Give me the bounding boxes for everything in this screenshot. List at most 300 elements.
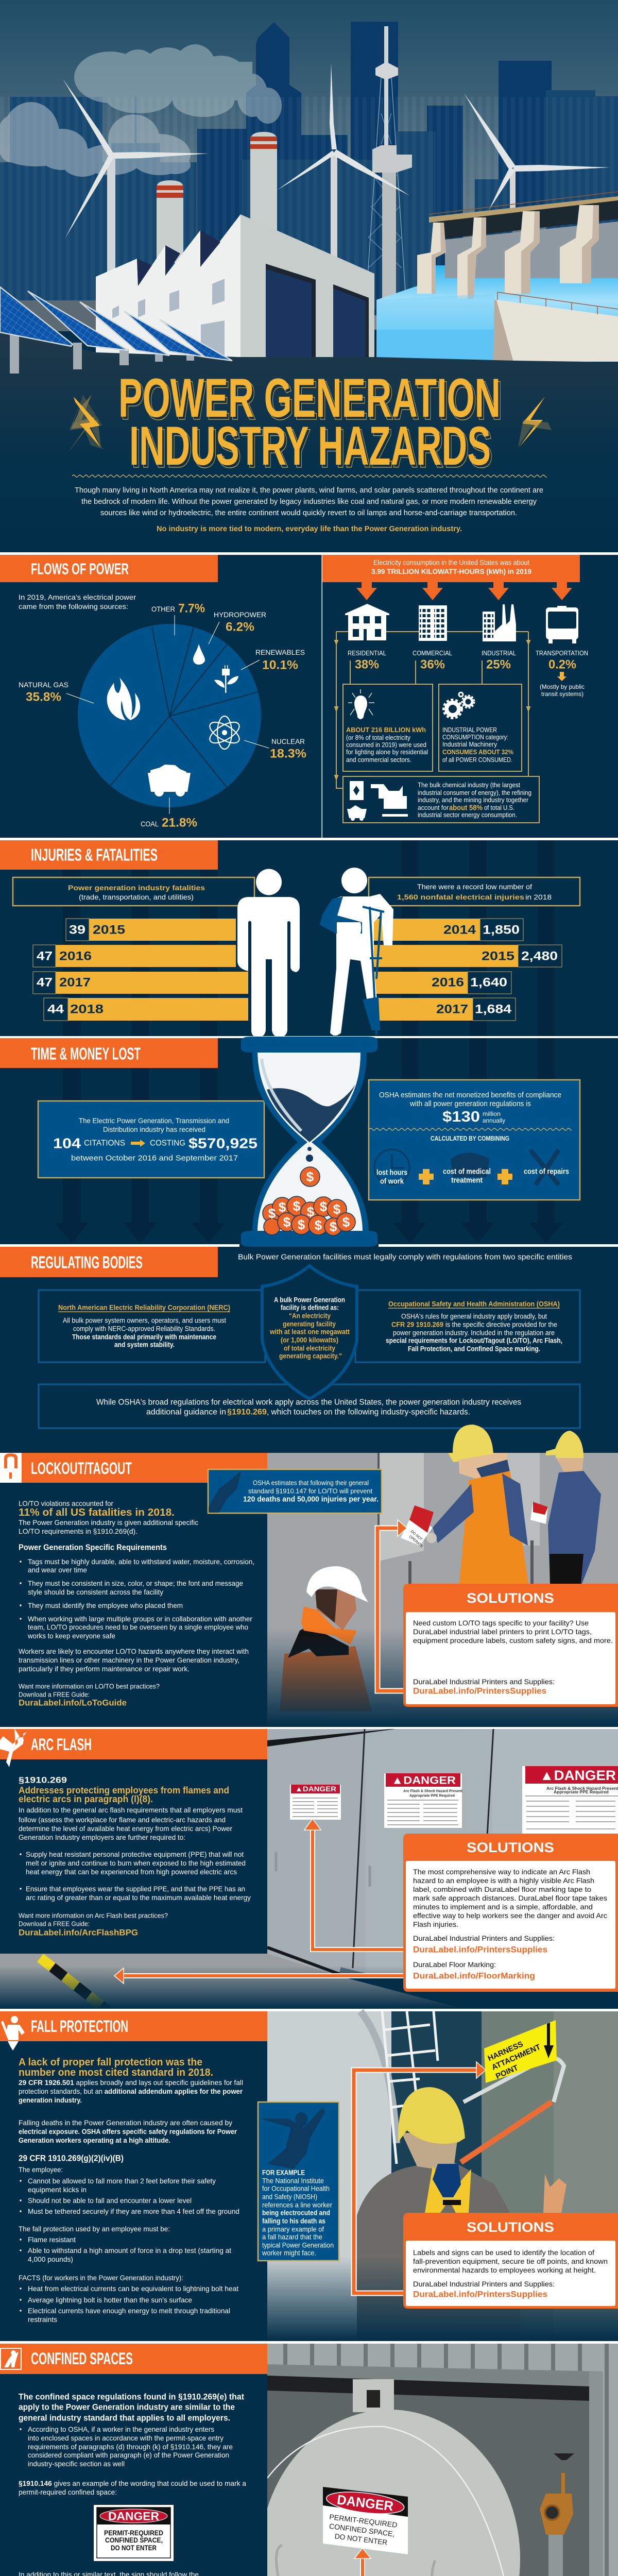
- panel: lighting consumption: and commercial sectors.: [346, 756, 411, 764]
- harness lanyard: [461, 2102, 552, 2162]
- text block: melt or ignite and continue to burn when exposed to the high estimated: [26, 1859, 246, 1867]
- text block: Power Generation Specific Requirements: [19, 1544, 167, 1552]
- consumption categories: 25%: [486, 657, 511, 672]
- harness attachment sign: [484, 2020, 557, 2083]
- text block: They must identify the employee who placed them: [28, 1601, 183, 1609]
- panel: pie chart of electrical sources: [66, 615, 269, 814]
- pie chart labels: COAL: [141, 820, 159, 828]
- pie chart labels: [19, 593, 306, 829]
- danger label 2: ▲DANGER: [391, 1774, 456, 1787]
- danger sign example: [94, 2505, 174, 2561]
- text block: The employee:: [19, 2165, 63, 2174]
- text block: heat energy that can be experienced from high powered electric arcs: [26, 1868, 237, 1876]
- harness attachment sign: POINT: [494, 2063, 520, 2081]
- panel: NERC: Those standards deal primarily with maintenance: [72, 1333, 216, 1341]
- panel: OSHA monetized benefits: treatment: [451, 1176, 483, 1185]
- intro text: sources like wind or hydroelectric, the entire continent would quickly revert to oil lamps and horse-and-carriage transportation.: [100, 509, 517, 517]
- title band background: [0, 330, 618, 552]
- solutions: arc flash: DuraLabel.info/FloorMarking: [413, 1971, 535, 1980]
- panel: electricity consumption header: 3.99 TRILLION KILOWATT-HOURS (kWh) in 2019: [371, 567, 531, 575]
- bar chart: nonfatal injuries: 2014: [443, 923, 476, 937]
- solutions: fall protection: environmental hazards to employees working at height.: [413, 2266, 596, 2274]
- shield: bulk power definition: (or 1,000 kilowatts): [281, 1336, 338, 1344]
- text block: permit-required confined space:: [19, 2488, 117, 2496]
- panel: NERC: All bulk power system owners, operators, and users must: [63, 1317, 226, 1324]
- text block: The fall protection used by an employee must be:: [19, 2225, 170, 2233]
- solutions: arc flash: hazard to an employee is with a highly visible Arc Flash: [413, 1876, 594, 1885]
- text block: [18, 2392, 248, 2576]
- text block: Should not be able to fall and encounter a lower level: [28, 2196, 192, 2205]
- icon: water drop: [193, 644, 205, 665]
- panel: OSHA regulations: CFR 29 1910.269: [391, 1321, 443, 1328]
- icon: coal cart: [148, 765, 191, 796]
- panel: OSHA regulations: is the specific directive provided for the: [445, 1321, 557, 1328]
- text block: When working with large multiple groups or in collaboration with another: [28, 1615, 252, 1623]
- shield: bulk power definition: of total electricity: [284, 1345, 335, 1352]
- hourglass with coins: $: [298, 1217, 305, 1232]
- panel: for example NIOSH: The National Institute: [262, 2177, 324, 2184]
- text block: Want more information on LO/TO best practices?: [19, 1683, 160, 1690]
- panel: OSHA closing note: additional guidance in: [146, 1408, 226, 1417]
- panel: OSHA monetized benefits: OSHA estimates the net monetized benefits of compliance: [379, 1091, 561, 1099]
- panel: for example NIOSH: for Occupational Health: [262, 2184, 330, 2193]
- consumption categories: TRANSPORTATION: [536, 650, 588, 657]
- panel: OSHA monetized benefits: annually: [483, 1117, 505, 1124]
- icon: light bulb: [348, 689, 374, 719]
- text block: Cannot be allowed to fall more than 2 feet before their safety: [28, 2177, 216, 2185]
- icon: injured person with sling and crutch: [320, 868, 393, 1036]
- wavy divider: [72, 474, 547, 478]
- danger sign on hatch: DANGER: [336, 2492, 394, 2514]
- hourglass with coins: $: [307, 1204, 315, 1219]
- panel: industrial consumption: Industrial Machinery: [442, 741, 497, 748]
- icon: flame: [107, 677, 140, 720]
- panel: citations: Distribution industry has received: [103, 1125, 205, 1133]
- panel: industrial consumption: [439, 684, 522, 771]
- panel: bulk chemical, refining, mining: industrial consumer of energy), the refining: [418, 789, 531, 796]
- panel: bulk chemical, refining, mining: account for: [418, 804, 449, 811]
- intro text: No industry is more tied to modern, everyday life than the Power Generation industry.: [157, 525, 462, 533]
- heading: LOCKOUT/TAGOUT: [31, 1459, 132, 1478]
- section: fall protection left panel: [0, 2011, 267, 2341]
- icon: confined space figure: [1, 2348, 21, 2369]
- heading: [0, 2344, 267, 2374]
- consumption categories: INDUSTRIAL: [482, 650, 516, 657]
- section: time and money lost heading: TIME & MONEY LOST: [31, 1044, 141, 1063]
- chimneys: [157, 132, 277, 263]
- text block: §1910.269: [19, 1775, 67, 1785]
- panel: for example NIOSH: [258, 2102, 339, 2261]
- text block: 11% of all US fatalities in 2018.: [19, 1507, 175, 1518]
- panel: electricity consumption header: Electricity consumption in the United States was about: [373, 558, 529, 567]
- panel: electricity consumption header: [322, 555, 580, 600]
- text block: restraints: [28, 2315, 57, 2324]
- solutions: lockout tagout: SOLUTIONS: [467, 1590, 554, 1606]
- callout: OSHA LO/TO estimate: standard §1910.147 for LO/TO will prevent: [248, 1487, 372, 1495]
- danger sign on hatch: CONFINED SPACE,: [329, 2522, 395, 2538]
- panel: for example NIOSH: FOR EXAMPLE: [262, 2169, 305, 2176]
- bar chart: nonfatal injuries: 2,480: [521, 949, 558, 963]
- bar chart: fatalities: [33, 919, 248, 1021]
- panel: citations: COSTING: [150, 1139, 185, 1148]
- pie chart labels: 10.1%: [262, 658, 298, 672]
- solutions: lockout tagout: [403, 1584, 618, 1707]
- section: flows of power heading: [0, 555, 218, 582]
- callout: nonfatal injuries: 1,560 nonfatal electrical injuries: [397, 893, 524, 901]
- hourglass with coins: $: [279, 1199, 286, 1215]
- heading: CONFINED SPACES: [31, 2349, 133, 2368]
- hourglass with coins: $: [268, 1206, 276, 1221]
- callout: nonfatal injuries: in 2018: [525, 893, 552, 901]
- hourglass with coins: $: [306, 1169, 314, 1184]
- text block: equipment kicks in: [28, 2185, 87, 2194]
- solar panels: [0, 287, 232, 374]
- text block: Download a FREE Guide:: [19, 1691, 90, 1698]
- heading: FALL PROTECTION: [31, 2017, 128, 2036]
- section: arc flash left panel: [0, 1728, 267, 1954]
- text block: Falling deaths in the Power Generation industry are often caused by: [19, 2119, 232, 2127]
- text block: Tags must be highly durable, able to withstand water, moisture, corrosion,: [28, 1557, 254, 1566]
- illustration: fall protection worker on ladder: [267, 2011, 618, 2341]
- shield: bulk power definition: “An electricity: [289, 1312, 331, 1320]
- text block: protection standards, but an additional addendum applies for the power: [19, 2087, 243, 2095]
- worker in back: [548, 1453, 601, 1584]
- section: time and money lost heading: [0, 1038, 218, 1068]
- text block: industry-specific section as well: [28, 2460, 125, 2468]
- pie chart labels: 35.8%: [26, 690, 61, 704]
- solutions: arc flash: DuraLabel Floor Marking:: [413, 1960, 496, 1969]
- text block: works to keep everyone safe: [27, 1632, 115, 1640]
- background arrow columns: [55, 840, 563, 1243]
- solutions: arc flash: effective way to help workers see the danger and avoid Arc: [413, 1911, 607, 1920]
- text block: LO/TO requirements in §1910.269(d).: [19, 1527, 138, 1535]
- callout: OSHA LO/TO estimate: [208, 1469, 382, 1513]
- bar chart: fatalities: 47: [37, 949, 53, 963]
- panel: industrial consumption: CONSUMPTION category:: [442, 734, 508, 741]
- panel: for example NIOSH: a fall hazard that the: [262, 2233, 322, 2241]
- text block: Electrical currents have enough energy to melt through traditional: [28, 2307, 230, 2315]
- heading: [0, 1453, 267, 1483]
- heading: [0, 2011, 267, 2041]
- panel: industrial consumption: of all POWER CONSUMED.: [442, 756, 512, 764]
- danger label 1: ▲DANGER: [295, 1785, 336, 1793]
- bar chart: nonfatal injuries: 1,684: [475, 1003, 512, 1016]
- panel: OSHA regulations: power generation industry. Included in the regulation are: [393, 1329, 555, 1336]
- section: injuries and fatalities heading: [0, 840, 218, 870]
- shield: bulk power definition: facility is defined as:: [281, 1303, 339, 1312]
- panel: lighting consumption: [343, 684, 433, 771]
- icon: lockout tags: [401, 1502, 548, 1549]
- worker in orange vest: [426, 1453, 528, 1584]
- hourglass with coins: $: [330, 1219, 337, 1234]
- text block: FACTS (for workers in the Power Generation industry):: [19, 2274, 183, 2282]
- icon: clock: [374, 1149, 409, 1184]
- bar chart: fatalities: 44: [47, 1003, 64, 1016]
- bar chart: nonfatal injuries: 1,640: [470, 976, 507, 989]
- panel: OSHA closing note: [39, 1384, 580, 1428]
- icon: padlock: [4, 1453, 18, 1479]
- consumption categories: 0.2%: [548, 657, 576, 672]
- bar chart: fatalities: 2018: [70, 1003, 104, 1016]
- text block: style should be consistent across the facility: [28, 1588, 163, 1596]
- panel: for example NIOSH: a primary example of: [262, 2226, 324, 2233]
- panel: OSHA monetized benefits: $130: [442, 1109, 480, 1125]
- pie chart labels: 6.2%: [226, 620, 254, 634]
- lightning bolts: [68, 395, 552, 453]
- icon: arc flash figure: [0, 1728, 27, 1767]
- danger sign on hatch: [321, 2487, 408, 2554]
- danger sign example: PERMIT-REQUIRED: [104, 2529, 163, 2537]
- shield: bulk power definition: A bulk Power Generation: [274, 1296, 345, 1303]
- bar chart: nonfatal injuries: 2016: [432, 976, 464, 989]
- illustration: confined space hatch: [260, 2344, 618, 2576]
- panel: OSHA monetized benefits: CALCULATED BY COMBINING: [431, 1135, 509, 1142]
- illustration: lockout tagout workers: [267, 1453, 618, 1727]
- text block: Download a FREE Guide:: [19, 1920, 90, 1928]
- pie chart labels: In 2019, America's electrical power: [19, 593, 136, 601]
- pie chart labels: 7.7%: [178, 602, 205, 615]
- icon: atom: [207, 716, 243, 749]
- consumption categories: transit systems): [541, 690, 583, 698]
- icon: fall protection worker: [1, 2016, 25, 2050]
- text block: Average lightning bolt is hotter than the sun's surface: [28, 2296, 192, 2304]
- panel: OSHA monetized benefits: million: [483, 1110, 501, 1117]
- intro text: the bedrock of modern life. Without the power generated by legacy industries like coal and natural gas, or more modern renewable energy: [81, 498, 537, 506]
- icon: lockout tags: OPERATE: [408, 1535, 424, 1549]
- arrow: fall protection solution to sign: [354, 2062, 486, 2293]
- bar chart: nonfatal injuries: 1,850: [483, 923, 520, 937]
- hourglass with coins: $: [283, 1214, 291, 1230]
- panel: NERC: and system stability.: [114, 1341, 175, 1349]
- worker back: [357, 2159, 520, 2341]
- danger sign example: DO NOT ENTER: [111, 2544, 157, 2552]
- text block: The confined space regulations found in §1910.269(e) that: [19, 2392, 244, 2402]
- solutions: lockout tagout: equipment procedure labels, custom safety signs, and more.: [413, 1636, 613, 1645]
- arrow: LO/TO solution to tag: [377, 1520, 410, 1691]
- panel: citations: between October 2016 and September 2017: [71, 1154, 238, 1162]
- icon: crossed wrenches: [530, 1150, 559, 1185]
- danger sign example: DANGER: [108, 2510, 159, 2522]
- panel: OSHA monetized benefits: cost of repairs: [524, 1167, 569, 1176]
- panel: OSHA monetized benefits: [369, 1080, 580, 1200]
- text block: electric arcs in paragraph (l)(8).: [19, 1794, 153, 1804]
- text block: and wear over time: [28, 1566, 87, 1574]
- pie chart labels: OTHER: [151, 605, 175, 613]
- panel: OSHA closing note: , which touches on the following industry-specific hazards.: [267, 1408, 470, 1417]
- text block: They must be consistent in size, color, or shape; the font and message: [28, 1579, 243, 1587]
- foreground worker with white hard hat: [280, 1566, 372, 1711]
- icon: plant with plug: [214, 665, 238, 693]
- text block: Supply heat resistant personal protective equipment (PPE) that will not: [26, 1850, 244, 1858]
- text block: electrical exposure. OSHA offers specific safety regulations for Power: [19, 2127, 237, 2136]
- callout: nonfatal injuries: There were a record low number of: [417, 883, 532, 891]
- text block: arc rating of greater than or equal to the maximum available heat energy: [26, 1893, 251, 1902]
- consumption categories: [348, 650, 588, 698]
- panel: OSHA monetized benefits: of work: [380, 1177, 404, 1186]
- icon: standing person: [237, 869, 300, 1037]
- panel: bulk chemical, refining, mining: about 58%: [449, 804, 483, 812]
- harness attachment sign: ATTACHMENT: [490, 2043, 542, 2072]
- solutions: lockout tagout: Need custom LO/TO tags specific to your facility? Use: [413, 1619, 589, 1627]
- text block: number one most cited standard in 2018.: [19, 2067, 213, 2078]
- callout: fatalities: (trade, transportation, and utilities): [79, 893, 194, 901]
- text block: Must be tethered securely if they are more than 4 feet off the ground: [28, 2207, 239, 2215]
- callout: fatalities: Power generation industry fatalities: [68, 884, 205, 892]
- text block: The Power Generation industry is given additional specific: [19, 1518, 198, 1527]
- panel: industrial consumption: CONSUMES ABOUT 32%: [442, 749, 513, 756]
- dam: [376, 192, 618, 362]
- section: lockout tagout left panel: [0, 1453, 267, 1727]
- panel: OSHA regulations: [355, 1290, 580, 1362]
- arrows: arc flash solution to label and floor tape: [114, 1819, 410, 1984]
- pie chart labels: 18.3%: [270, 747, 306, 760]
- heading: [0, 1729, 267, 1759]
- text block: [19, 1499, 254, 1707]
- solutions: arc flash: DuraLabel Industrial Printers and Supplies:: [413, 1934, 555, 1942]
- section: injuries and fatalities heading: INJURIES & FATALITIES: [31, 845, 158, 865]
- panel: NERC: [39, 1290, 265, 1362]
- solutions: fall protection: fall-prevention equipment, secure tie off points, and known: [413, 2257, 608, 2265]
- pie chart labels: NUCLEAR: [271, 737, 305, 745]
- panel: lighting consumption: (or 8% of total electricity: [346, 734, 411, 741]
- solutions: arc flash: label, combined with DuraLabel floor marking tape to: [413, 1885, 591, 1893]
- bar chart: fatalities: 2015: [93, 923, 125, 937]
- text block: 29 CFR 1910.269(g)(2)(iv)(B): [19, 2154, 124, 2163]
- panel: for example NIOSH: falling to his death as: [262, 2217, 325, 2225]
- panel: lighting consumption: for lighting alone by residential: [346, 749, 428, 756]
- text block: DuraLabel.info/LoToGuide: [19, 1698, 127, 1707]
- hourglass with coins: $: [342, 1214, 350, 1230]
- panel: bulk chemical, refining, mining: The bulk chemical industry (the largest: [418, 782, 520, 789]
- bar chart: nonfatal injuries: 2015: [482, 949, 514, 963]
- panel: OSHA regulations: OSHA's rules for general industry apply broadly, but: [401, 1313, 547, 1320]
- consumption categories: COMMERCIAL: [413, 650, 452, 657]
- panel: citations: CITATIONS: [84, 1139, 125, 1148]
- intro text: [75, 486, 543, 533]
- hourglass with coins: [241, 1037, 377, 1247]
- icon: industrial factory: [483, 604, 516, 641]
- text block: follow (assess the workplace for flame and electric-arc hazards and: [19, 1816, 226, 1824]
- icon: commercial building: [419, 605, 447, 641]
- panel: industrial consumption: INDUSTRIAL POWER: [442, 726, 497, 734]
- text block: §1910.146 gives an example of the wording that could be used to mark a: [19, 2479, 246, 2487]
- arrow: confined space solution to sign: [354, 2548, 410, 2576]
- solutions: fall protection: Labels and signs can be used to identify the location of: [413, 2248, 594, 2257]
- shield: bulk power definition: generating facility: [283, 1320, 336, 1328]
- text block: 4,000 pounds): [28, 2255, 73, 2263]
- section divider: [0, 552, 618, 555]
- panel: OSHA closing note: While OSHA's broad regulations for electrical work apply across the United States, the power generation industry receives: [96, 1398, 521, 1406]
- danger label 2: Appropriate PPE Required: [409, 1794, 455, 1798]
- panel: for example NIOSH: typical Power Generation: [262, 2241, 334, 2249]
- danger label 3: Appropriate PPE Required: [554, 1789, 609, 1794]
- panel: OSHA monetized benefits: lost hours: [376, 1168, 407, 1177]
- icon: residential house: [345, 604, 389, 640]
- text block: Heat from electrical currents can be equivalent to lightning bolt heat: [28, 2284, 238, 2293]
- section: regulating bodies heading: [0, 1247, 218, 1277]
- callout: OSHA LO/TO estimate: 120 deaths and 50,000 injuries per year.: [243, 1495, 379, 1503]
- panel: for example NIOSH: references a line worker: [262, 2201, 332, 2209]
- danger sign example: CONFINED SPACE,: [105, 2536, 163, 2544]
- panel: citations: The Electric Power Generation, Transmission and: [79, 1116, 229, 1125]
- solutions: fall protection: [403, 2213, 618, 2309]
- panel: for example NIOSH: and Safety (NIOSH): [262, 2193, 317, 2201]
- text block: [19, 1775, 251, 1937]
- callout: nonfatal injuries: [369, 877, 580, 906]
- regulating intro text: Bulk Power Generation facilities must legally comply with regulations from two specific entities: [238, 1253, 572, 1261]
- callout: OSHA LO/TO estimate: OSHA estimates that following their general: [253, 1479, 369, 1487]
- solutions: arc flash: The most comprehensive way to indicate an Arc Flash: [413, 1868, 590, 1876]
- text block: Generation workers operating at a high altitude.: [19, 2136, 170, 2144]
- danger label 3: [522, 1766, 618, 1835]
- solutions: lockout tagout: DuraLabel Industrial Printers and Supplies:: [413, 1677, 555, 1686]
- panel: bulk chemical, refining, mining: [343, 776, 539, 823]
- panel: OSHA closing note: §1910.269: [227, 1408, 267, 1417]
- panel: citations: 104: [53, 1136, 81, 1151]
- panel: for example NIOSH: worker might face.: [262, 2249, 316, 2257]
- danger label 2: [384, 1773, 462, 1828]
- bar chart: nonfatal injuries: 2017: [436, 1003, 468, 1016]
- solutions: fall protection: DuraLabel.info/PrintersSupplies: [413, 2290, 547, 2299]
- bar chart: nonfatal injuries: [373, 919, 562, 1021]
- bar chart: fatalities: 47: [37, 976, 53, 989]
- text block: A lack of proper fall protection was the: [19, 2057, 202, 2068]
- worker hard hats over regulating section: [453, 1425, 583, 1461]
- danger sign on hatch: DO NOT ENTER: [334, 2532, 388, 2547]
- text block: Able to withstand a high amount of force in a drop test (starting at: [28, 2246, 231, 2255]
- text block: determine the level of available heat energy from electric arcs) Power: [19, 1824, 232, 1833]
- text block: into enclosed spaces in accordance with the permit-space entry: [28, 2434, 224, 2442]
- text block: Flame resistant: [28, 2235, 76, 2244]
- section: confined spaces left panel: [0, 2344, 267, 2576]
- wind turbines: [63, 63, 610, 272]
- panel: OSHA regulations: Occupational Safety and Health Administration (OSHA): [388, 1300, 560, 1308]
- text block: [19, 2057, 243, 2324]
- shield: bulk power definition: [262, 1266, 357, 1399]
- panel: OSHA monetized benefits: cost of medical: [443, 1167, 491, 1176]
- pie chart labels: RENEWABLES: [255, 648, 305, 656]
- panel: bulk chemical, refining, mining: of total U.S.: [484, 804, 514, 811]
- pie chart labels: 21.8%: [162, 816, 197, 829]
- section: regulating bodies heading: REGULATING BODIES: [31, 1253, 143, 1272]
- panel: bulk chemical, refining, mining: industry, and the mining industry together: [418, 796, 528, 804]
- text block: Want more information on Arc Flash best practices?: [19, 1911, 168, 1920]
- text block: LO/TO violations accounted for: [19, 1499, 113, 1507]
- text block: Addresses protecting employees from flames and: [19, 1785, 229, 1795]
- valve: [540, 2453, 574, 2576]
- consumption categories: 36%: [420, 657, 445, 672]
- text block: generation industry.: [19, 2096, 82, 2104]
- solutions: arc flash: Flash injuries.: [413, 1920, 458, 1928]
- callout: fatalities: [13, 877, 254, 906]
- harness attachment sign: HARNESS: [487, 2040, 524, 2063]
- text block: team, LO/TO procedures need to be overseen by a single employee who: [28, 1623, 248, 1631]
- solutions: arc flash: DuraLabel.info/PrintersSupplies: [413, 1944, 547, 1955]
- panel: NERC: North American Electric Reliability Corporation (NERC): [58, 1303, 230, 1312]
- solutions: arc flash: [403, 1834, 618, 1992]
- shield: bulk power definition: with at least one megawatt: [269, 1328, 350, 1335]
- text block: particularly if they perform maintenance or repair work.: [19, 1665, 190, 1673]
- solutions: arc flash: SOLUTIONS: [467, 1840, 554, 1855]
- danger label 3: Arc Flash & Shock Hazard Present: [546, 1786, 618, 1791]
- section: flows of power heading: FLOWS OF POWER: [31, 560, 129, 578]
- panel: lighting consumption: ABOUT 216 BILLION kWh: [346, 726, 426, 734]
- danger label 3: ▲DANGER: [540, 1768, 616, 1783]
- text block: requirements of paragraphs (d) through (k) of §1910.146, they are: [28, 2443, 233, 2451]
- hero illustration: power plants, wind turbines, solar panels and dam: [0, 0, 618, 362]
- consumption categories: 38%: [355, 657, 379, 672]
- bar chart: fatalities: 2016: [59, 949, 92, 963]
